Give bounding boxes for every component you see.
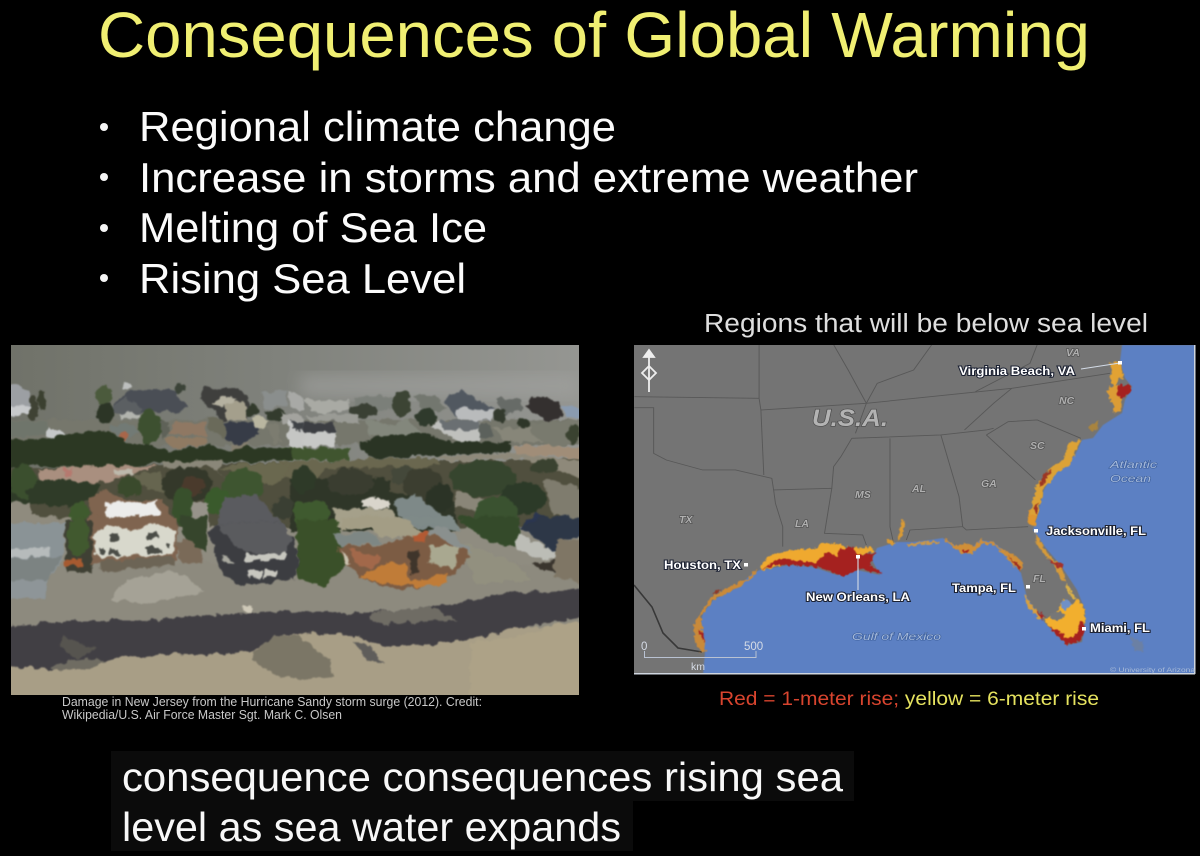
state borders [634,345,1110,547]
map labels: water bodies [852,459,1158,643]
north arrow [642,350,656,392]
photo credit [62,695,482,722]
atlantic coast flooding [1030,362,1132,515]
map labels: cities: Miami, FL [1090,623,1150,635]
map labels: states: SC [1030,440,1045,452]
map legend: Red = 1-meter rise; yellow = 6-meter rise [719,688,1099,710]
bullet: regional climate change: Regional climate change [139,103,616,150]
map labels: cities: Virginia Beach, VA [959,366,1075,378]
map: sea level rise [634,345,1196,675]
leader lines [858,363,1120,590]
map scale labels [641,641,763,673]
map labels: states: TX [679,514,693,526]
map labels: cities: Jacksonville, FL [1046,526,1146,538]
bullet: melting of sea ice: Melting of Sea Ice [139,204,487,251]
map scale labels: 0 [641,641,647,653]
video subtitle: consequence consequences rising sea [122,754,843,800]
florida flooding [943,510,1143,652]
bullet: storms and extreme weather: Increase in storms and extreme weather [139,154,918,201]
map scale labels: 500 [744,641,763,653]
map copyright: © University of Arizona [1110,666,1195,674]
photo base layers [3,420,587,527]
photo credit: Wikipedia/U.S. Air Force Master Sgt. Mark C. Olsen [62,708,342,722]
map labels: cities: New Orleans, LA [806,592,910,604]
map labels: states: GA [981,478,997,490]
map labels: cities [664,366,1150,635]
map labels: states: FL [1033,573,1046,585]
photo: hurricane sandy damage [3,345,587,707]
ocean [698,345,1195,675]
map labels: states: LA [795,518,809,530]
map labels: water bodies: Atlantic [1109,459,1158,471]
bullet: rising sea level: Rising Sea Level [139,255,466,302]
map labels: states: VA [1066,347,1080,359]
map heading: Regions that will be below sea level [704,310,1148,338]
foreground right [297,517,583,590]
map labels: states: AL [911,483,926,495]
map labels: cities: Tampa, FL [952,583,1016,595]
map labels: water bodies: Ocean [1110,473,1151,485]
bullet list [100,103,918,302]
scale bar [644,651,756,658]
map label: country: U.S.A. [812,405,888,432]
map scale labels: km [691,661,705,673]
map labels: water bodies: Gulf of Mexico [852,631,941,643]
title: Consequences of Global Warming [98,0,1090,71]
map labels: cities: Houston, TX [664,560,741,572]
city markers [744,361,1122,630]
gulf coast flooding [693,520,940,653]
back row left [7,382,303,528]
map labels: states [679,347,1080,585]
video subtitle [111,751,854,851]
video subtitle: level as sea water expands [122,804,621,850]
map labels: states: MS [855,489,871,501]
map edges [1194,345,1196,674]
map labels: states: NC [1059,395,1075,407]
back row right [280,390,583,532]
photo credit: Damage in New Jersey from the Hurricane Sandy storm surge (2012). Credit: [62,695,482,709]
foreground left [7,517,300,613]
